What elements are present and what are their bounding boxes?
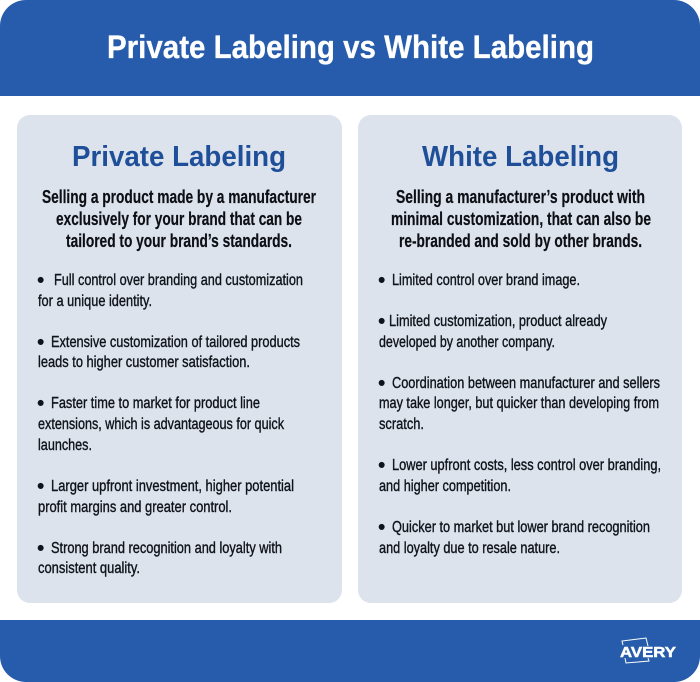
bullet: upfront costs	[378, 454, 661, 495]
bullet: quicker to market	[378, 516, 650, 557]
bullet: limited customization: developed by another company.	[379, 334, 555, 351]
bullet: time to market: Faster time to market for product line	[51, 395, 260, 412]
definition: white labeling	[391, 187, 651, 251]
panel: private labeling	[17, 115, 342, 603]
definition: private labeling: exclusively for your brand that can be	[56, 209, 302, 229]
definition: private labeling	[42, 187, 316, 251]
bullet: upfront costs: and higher competition.	[379, 478, 511, 495]
bullet: brand recognition: •	[37, 537, 44, 560]
bullet: brand image: Limited control over brand image.	[392, 272, 580, 289]
bullet: customization: Extensive customization of tailored products	[51, 334, 300, 351]
bullet: brand image	[378, 269, 580, 292]
bullet: coordination	[378, 372, 660, 433]
bullet: customization: leads to higher customer satisfaction.	[38, 354, 250, 371]
bullet: coordination: scratch.	[379, 416, 424, 433]
bullet: customization	[37, 331, 300, 371]
panel: white labeling	[358, 115, 682, 603]
bullet: investment: Larger upfront investment, higher potential	[51, 478, 294, 495]
bullet: upfront costs: •	[378, 454, 385, 477]
bullet: investment: profit margins and greater control.	[38, 499, 232, 516]
bullet: branding control: Full control over branding and customization	[54, 272, 303, 289]
bullet: investment	[37, 475, 294, 516]
bullet: time to market: extensions, which is advantageous for quick	[38, 416, 285, 433]
header banner	[0, 0, 700, 96]
bullet: investment: •	[37, 475, 44, 498]
bullet: time to market: launches.	[38, 437, 92, 454]
bullet: branding control	[37, 269, 303, 310]
logo: avery: AVERY	[620, 644, 676, 661]
bullet: limited customization: •	[378, 310, 385, 333]
bullet: time to market: •	[37, 392, 44, 415]
heading: white labeling: White Labeling	[422, 141, 619, 173]
title: Private Labeling vs White Labeling	[107, 29, 594, 65]
footer banner	[0, 620, 700, 682]
definition: private labeling: tailored to your brand’s standards.	[66, 231, 292, 251]
bullet: limited customization: Limited customization, product already	[389, 313, 607, 330]
bullet: brand recognition	[37, 537, 282, 577]
bullet: brand recognition: consistent quality.	[38, 560, 140, 577]
bullet: coordination: •	[378, 372, 385, 395]
logo: avery	[620, 638, 676, 663]
bullet: branding control: for a unique identity.	[38, 293, 152, 310]
bullet: brand image: •	[378, 269, 385, 292]
bullet: branding control: •	[37, 269, 44, 292]
bullet: brand recognition: Strong brand recognition and loyalty with	[51, 540, 282, 557]
bullet: limited customization	[378, 310, 607, 351]
bullet: quicker to market: and loyalty due to resale nature.	[379, 540, 560, 557]
bullet: customization: •	[37, 331, 44, 354]
bullet: quicker to market: •	[378, 516, 385, 539]
bullet: time to market	[37, 392, 285, 454]
heading: private labeling: Private Labeling	[72, 141, 286, 173]
definition: private labeling: Selling a product made by a manufacturer	[42, 187, 316, 207]
